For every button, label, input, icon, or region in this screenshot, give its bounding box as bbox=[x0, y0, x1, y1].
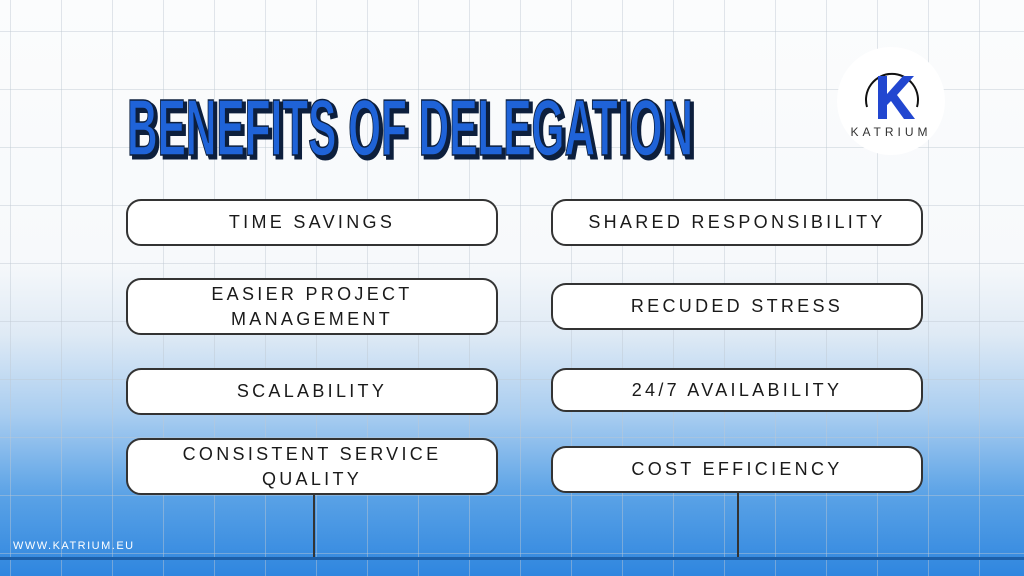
box: easier project management bbox=[126, 278, 498, 335]
connector right bbox=[737, 493, 738, 559]
box: 24/7 availability: 24/7 AVAILABILITY bbox=[632, 380, 842, 400]
logo: Katrium bbox=[838, 48, 944, 154]
box: shared responsibility: SHARED RESPONSIBILITY bbox=[588, 212, 886, 232]
bottom line bbox=[0, 557, 1024, 560]
box: scalability: SCALABILITY bbox=[237, 381, 387, 401]
box: 24/7 availability bbox=[551, 368, 923, 412]
box: consistent service quality: CONSISTENT SERVICE bbox=[183, 444, 441, 464]
website url: WWW.KATRIUM.EU bbox=[13, 540, 135, 552]
box: easier project management: MANAGEMENT bbox=[231, 308, 393, 328]
box: time savings bbox=[126, 199, 498, 246]
logo: Katrium: KATRIUM bbox=[850, 125, 932, 139]
box: cost efficiency bbox=[551, 446, 923, 493]
box: reduced stress: RECUDED STRESS bbox=[631, 296, 843, 316]
box: reduced stress bbox=[551, 283, 923, 330]
box: consistent service quality bbox=[126, 438, 498, 495]
box: scalability bbox=[126, 368, 498, 415]
connector left bbox=[313, 495, 314, 559]
box: time savings: TIME SAVINGS bbox=[229, 212, 395, 232]
box: consistent service quality: QUALITY bbox=[262, 468, 362, 488]
box: shared responsibility bbox=[551, 199, 923, 246]
box: cost efficiency: COST EFFICIENCY bbox=[631, 459, 843, 479]
box: easier project management: EASIER PROJECT bbox=[211, 284, 413, 304]
